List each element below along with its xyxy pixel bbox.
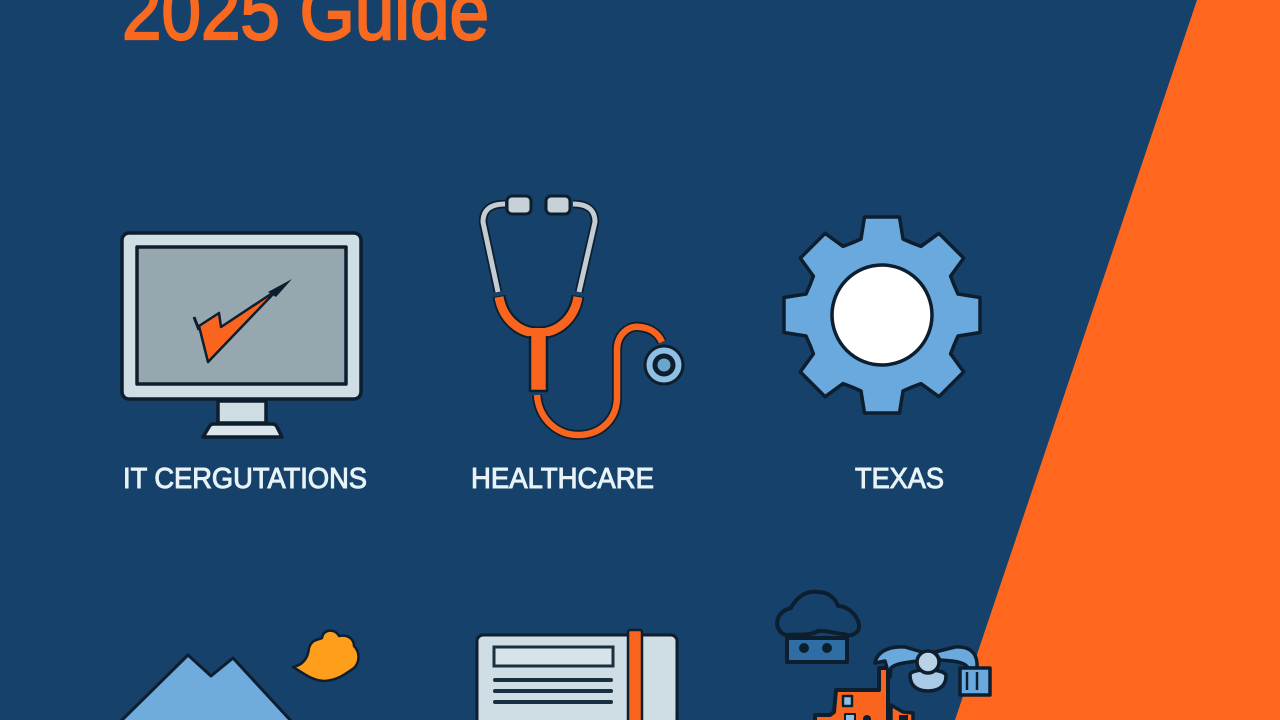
label: Texas: TEXAS: [855, 463, 944, 495]
icon: monitor with checkmark: [122, 233, 361, 437]
panel: orange diagonal: [955, 0, 1280, 720]
icon: gear: [784, 217, 980, 413]
icon: stethoscope: [483, 196, 683, 435]
icon: mountains: [120, 655, 292, 720]
icon: notebook: [477, 630, 677, 720]
icon: orange cloud: [293, 631, 358, 681]
icon: city and operator: [815, 647, 990, 720]
label: IT certifications: IT CERGUTATIONS: [123, 463, 367, 495]
label: healthcare: HEALTHCARE: [471, 463, 654, 495]
icon: cloud with server: [777, 592, 859, 662]
